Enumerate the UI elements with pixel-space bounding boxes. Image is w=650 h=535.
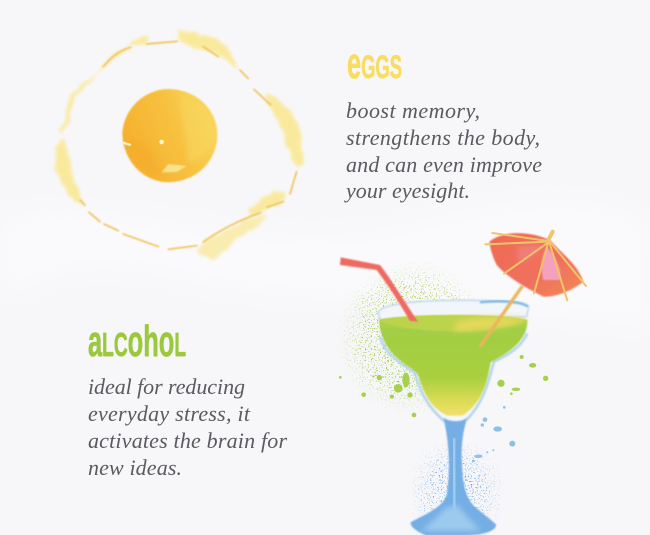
- paint splatter blue: [472, 406, 515, 462]
- text block: eggs: [344, 98, 542, 203]
- umbrella ribs: [485, 232, 586, 300]
- drink: [379, 315, 527, 416]
- text block: alcohol: everyday stress, it: [88, 401, 251, 426]
- egg white outline: [54, 30, 303, 261]
- egg yolk: [122, 89, 217, 182]
- text block: alcohol: ideal for reducing: [88, 374, 245, 399]
- glass outline: [380, 333, 527, 422]
- drink surface: [379, 315, 527, 332]
- text block: alcohol: new ideas.: [88, 455, 182, 480]
- glass rim: [378, 300, 529, 320]
- icon: fried egg: [54, 30, 303, 261]
- text block: eggs: your eyesight.: [344, 178, 470, 203]
- glass stem and foot: [411, 418, 496, 535]
- text block: eggs: strengthens the body,: [346, 125, 540, 150]
- heading: alcohol: aLCohoL: [88, 317, 186, 366]
- text block: eggs: and can even improve: [346, 152, 542, 177]
- paint splatter green: [339, 355, 548, 417]
- umbrella canopy: [489, 233, 583, 297]
- icon: cocktail: [339, 232, 586, 535]
- text block: alcohol: [88, 374, 287, 480]
- fine spray blue: [420, 452, 493, 532]
- fine spray green: [350, 275, 477, 402]
- text block: alcohol: activates the brain for: [88, 428, 287, 453]
- umbrella stick: [480, 286, 523, 347]
- heading: eggs: eGGS: [347, 39, 402, 88]
- egg white rim strokes: [80, 41, 297, 249]
- straw: [340, 257, 418, 322]
- text block: eggs: boost memory,: [346, 98, 480, 123]
